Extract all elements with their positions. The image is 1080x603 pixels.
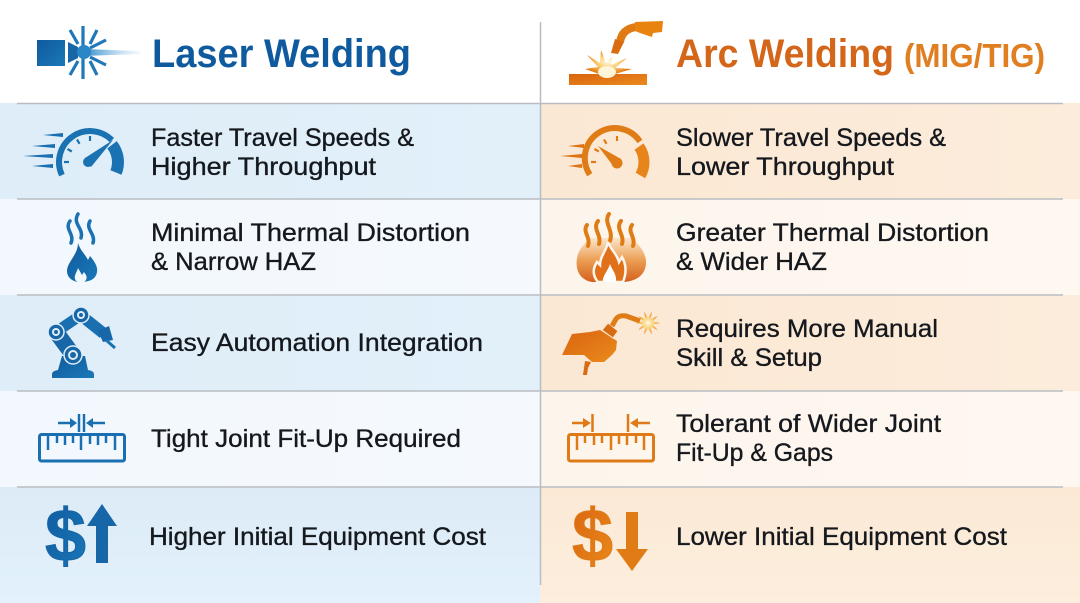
row: cost, laser	[45, 494, 486, 577]
subtitle: MIG/TIG: (MIG/TIG)	[904, 37, 1045, 74]
icon: robot arm	[48, 307, 115, 378]
row backgrounds: arc column	[540, 103, 1080, 603]
text: slower travel speeds: Lower Throughput	[676, 153, 894, 181]
text: easy automation integration: Easy Automation Integration	[151, 329, 483, 357]
text: tolerant of wider joint	[676, 410, 941, 467]
text: minimal thermal distortion: & Narrow HAZ	[151, 248, 316, 276]
text: tolerant of wider joint: Tolerant of Wider Joint	[676, 410, 941, 438]
icon: dollar with up arrow	[45, 494, 117, 577]
text: greater thermal distortion: Greater Thermal Distortion	[676, 219, 989, 247]
row: fit-up, arc	[568, 410, 941, 467]
icon: dollar with down arrow	[572, 494, 648, 577]
text: requires more manual: Requires More Manual	[676, 315, 938, 343]
icon: small flame with heat waves	[67, 214, 97, 282]
text: minimal thermal distortion: Minimal Thermal Distortion	[151, 219, 470, 247]
text: greater thermal distortion: & Wider HAZ	[676, 248, 827, 276]
text: slower travel speeds	[676, 124, 946, 181]
text: higher initial cost: Higher Initial Equipment Cost	[149, 523, 486, 551]
panel: arc welding header	[569, 21, 1045, 85]
text: minimal thermal distortion	[151, 219, 470, 276]
text: requires more manual	[676, 315, 938, 372]
row: speed, arc	[560, 124, 946, 181]
text: lower initial cost: Lower Initial Equipment Cost	[676, 523, 1007, 551]
icon: large flame with heat waves	[577, 214, 646, 282]
row: distortion, arc	[577, 214, 989, 282]
icon: laser beam	[37, 26, 140, 79]
text: tolerant of wider joint: Fit-Up & Gaps	[676, 439, 833, 467]
row: fit-up, laser	[40, 414, 461, 461]
title: arc welding: Arc Welding	[676, 32, 894, 76]
icon: hand holding torch	[562, 312, 660, 375]
text: slower travel speeds: Slower Travel Speeds &	[676, 124, 946, 152]
row: speed, laser	[23, 124, 414, 181]
icon: welding torch	[569, 21, 663, 85]
icon: ruler with narrow gap	[40, 414, 124, 461]
panel: laser welding header	[37, 26, 411, 79]
row: distortion, laser	[67, 214, 470, 282]
text: faster travel speeds: Faster Travel Speeds &	[151, 124, 414, 152]
icon: ruler with wide gap	[568, 414, 654, 461]
text: requires more manual: Skill & Setup	[676, 344, 822, 372]
row: cost, arc	[572, 494, 1007, 577]
icon: dollar with up arrow: $	[45, 494, 86, 577]
text: tight joint fit-up: Tight Joint Fit-Up Required	[151, 425, 461, 453]
icon: slow speedometer	[560, 128, 644, 176]
text: faster travel speeds	[151, 124, 414, 181]
row: automation, laser	[48, 307, 483, 378]
row backgrounds: laser column	[0, 103, 540, 603]
icon: fast speedometer	[23, 131, 118, 175]
icon: dollar with down arrow: $	[572, 494, 613, 577]
title: laser welding: Laser Welding	[152, 32, 411, 76]
row: manual skill, arc	[562, 312, 938, 375]
text: faster travel speeds: Higher Throughput	[151, 153, 376, 181]
text: greater thermal distortion	[676, 219, 989, 276]
